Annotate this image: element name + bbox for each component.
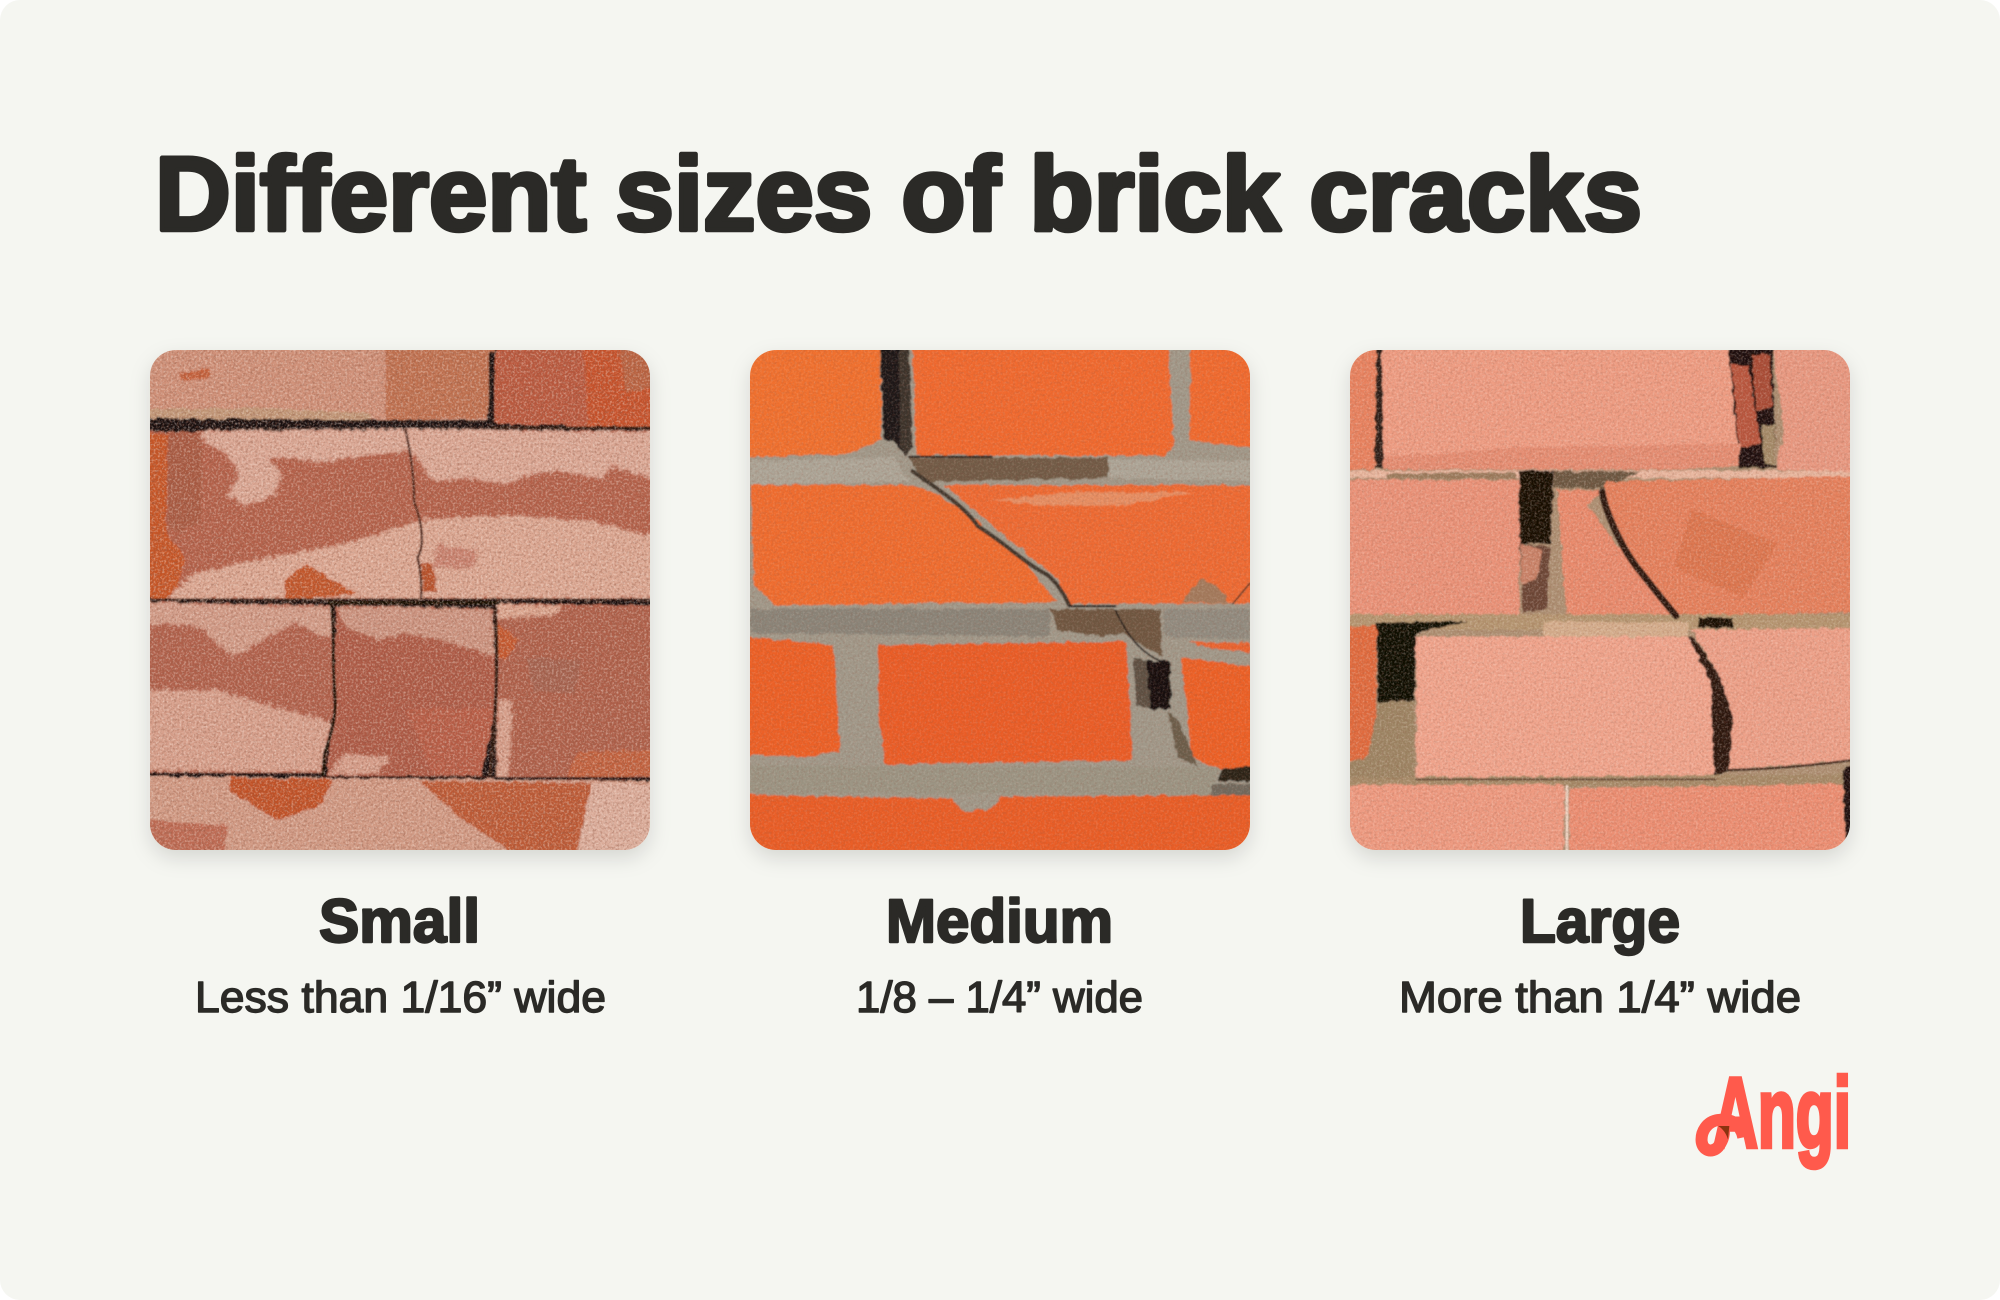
logo: Angi <box>1702 1057 1851 1168</box>
photo: large crack brick wall <box>1344 344 1857 857</box>
logo: Angi: Angi <box>1713 1057 1851 1168</box>
label: medium: Medium <box>886 887 1113 955</box>
width: large: More than 1/4” wide <box>1399 973 1801 1022</box>
panel: medium crack <box>744 344 1257 1022</box>
photo: medium crack brick wall <box>744 344 1257 857</box>
width: medium: 1/8 – 1/4” wide <box>856 973 1143 1022</box>
panel: small crack <box>144 344 657 1022</box>
label: large: Large <box>1520 887 1680 955</box>
width: small: Less than 1/16” wide <box>195 973 606 1022</box>
title: Different sizes of brick cracks <box>155 136 1642 253</box>
photo: small crack brick wall <box>144 344 657 857</box>
icon: logo swash <box>1702 1120 1743 1150</box>
label: small: Small <box>319 887 480 955</box>
panel: large crack <box>1344 344 1857 1022</box>
